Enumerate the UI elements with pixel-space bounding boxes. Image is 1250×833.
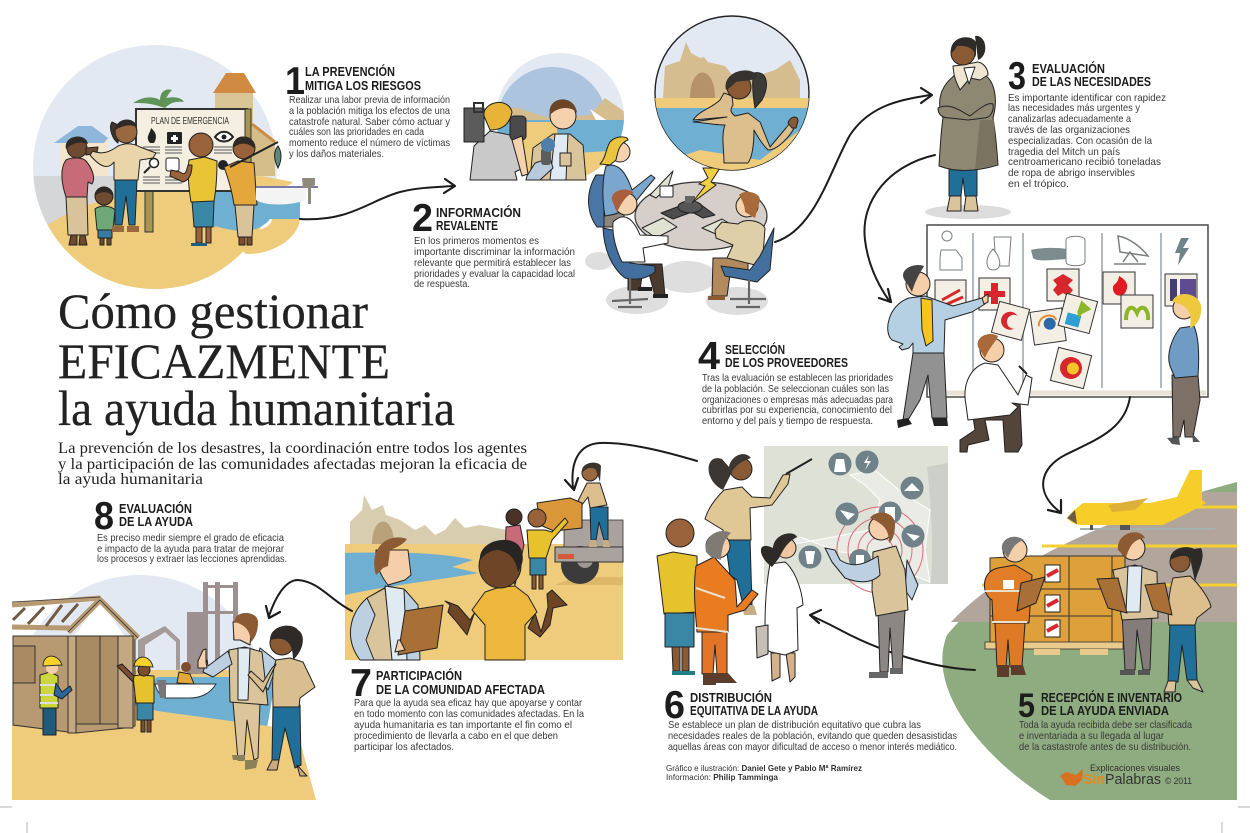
text block: step 7: procedimiento de llevarla a cabo en el que deben — [354, 731, 558, 742]
figure: woman in beige — [248, 626, 315, 776]
speech bubble with aid worker — [655, 16, 810, 203]
heading: step 1 — [285, 60, 421, 103]
text block: step 3 — [1008, 93, 1166, 190]
arrow: step 6 to 7 — [565, 443, 697, 490]
text block: step 1: cuáles son las prioridades en cada — [289, 127, 424, 138]
truck — [555, 520, 623, 584]
heading: step 2: 2 — [412, 197, 433, 240]
heading: step 3 — [1008, 55, 1151, 98]
icon: bull — [1060, 769, 1083, 786]
map icons — [805, 455, 920, 568]
text block: step 5 — [1019, 720, 1192, 753]
logo: SinPalabras — [1060, 763, 1192, 788]
scene background — [12, 575, 316, 825]
text block: step 7: Para que la ayuda sea eficaz hay que apoyarse y contar — [354, 698, 583, 709]
figure: worker in orange — [984, 537, 1045, 677]
text block: step 3: especializadas. Con ocasión de la — [1008, 136, 1152, 147]
heading: step 3: DE LAS NECESIDADES — [1032, 75, 1151, 89]
credits — [666, 763, 862, 782]
houses and church — [54, 73, 275, 176]
figure: boy in yellow shirt — [445, 540, 567, 660]
arrow: step 4 to 5 — [1043, 397, 1130, 513]
panel: step 6 distribution scene — [657, 446, 948, 685]
crop marks — [0, 807, 1250, 833]
text block: step 8 — [97, 533, 287, 565]
panel: step 1 emergency plan scene — [30, 45, 318, 300]
text block: step 5: de la castastrofe antes de su distribución. — [1019, 742, 1191, 753]
text block: step 8: e impacto de la ayuda para tratar de mejorar — [97, 544, 285, 555]
text block: step 3: canalizarlas adecuadamente a — [1008, 114, 1131, 125]
floor shadows — [585, 252, 768, 315]
heading: step 7: 7 — [350, 662, 372, 705]
board icons — [143, 128, 233, 183]
figure: aid worker — [198, 613, 278, 770]
logo: SinPalabras: © 2011 — [1165, 776, 1192, 787]
text block: step 6 — [668, 720, 957, 753]
text block: step 3: través de las organizaciones — [1008, 125, 1130, 136]
text block: step 1: momento reduce el número de víctimas — [289, 138, 450, 149]
whiteboard — [927, 225, 1208, 397]
figure: woman on truck — [576, 463, 610, 547]
figure: man in vest — [825, 513, 918, 678]
text block: step 7: en todo momento con las comunidades afectadas. En la — [354, 709, 584, 720]
heading: step 4: 4 — [698, 335, 720, 378]
heading: step 5 — [1018, 687, 1182, 725]
heading: step 6: 6 — [664, 684, 685, 727]
heading: step 3: 3 — [1008, 55, 1026, 98]
cargo boxes — [985, 556, 1125, 655]
text block: step 7 — [354, 698, 584, 753]
panel: step 5 airfield background — [942, 482, 1237, 800]
text block: step 2: prioridades y evaluar la capacidad local — [414, 269, 575, 280]
subtitle: la ayuda humanitaria — [58, 471, 203, 488]
heading: step 3: EVALUACIÓN — [1032, 61, 1105, 76]
heading: step 2: REVALENTE — [436, 219, 498, 233]
subtitle — [58, 440, 527, 488]
text block: step 4: cubrirlas por su experiencia, conocimiento del — [702, 405, 892, 416]
figure: child in green — [95, 187, 115, 245]
figure: boy in orange with fishing rod — [224, 136, 281, 245]
figure: reporter — [526, 99, 586, 180]
text block: step 1: Realizar una labor previa de información — [289, 95, 450, 106]
map — [764, 446, 948, 593]
figure: builder in yellow — [117, 657, 154, 732]
figure: instructor — [90, 119, 156, 232]
credits: Información: Philip Tamminga — [666, 772, 778, 782]
panel: step 2 meeting scene — [585, 16, 810, 315]
text block: step 7: ayuda humanitaria es tan importante el fin como el — [354, 720, 572, 731]
papers and cup on table — [642, 171, 737, 238]
figure: step 3 woman in coat — [925, 36, 1011, 219]
palm tree — [133, 89, 184, 108]
text block: step 8: los procesos y extraer las lecciones aprendidas. — [97, 554, 287, 565]
heading: step 5: DE LA AYUDA ENVIADA — [1041, 704, 1169, 718]
column icons — [940, 231, 1189, 270]
title: EFICAZMENTE — [58, 333, 390, 389]
cargo box — [537, 498, 582, 531]
figure: boy in yellow — [170, 133, 217, 246]
subtitle: y la participación de las comunidades afectadas mejoran la eficacia de — [58, 456, 527, 473]
figure: aid worker with clipboard — [350, 537, 443, 660]
text block: step 2 — [414, 236, 575, 290]
heading: step 2 — [412, 197, 521, 240]
speakerphone — [661, 196, 715, 219]
arrow: step 5 to 6 — [810, 610, 975, 670]
text block: step 4: Tras la evaluación se establecen las prioridades — [702, 373, 893, 384]
text block: step 4: organizaciones o empresas más adecuadas para — [702, 395, 893, 406]
heading: step 6: DISTRIBUCIÓN — [690, 690, 772, 705]
figure: kneeling man — [960, 334, 1032, 452]
heading: step 7: DE LA COMUNIDAD AFECTADA — [376, 683, 545, 697]
heading: step 4 — [698, 335, 848, 378]
text block: step 1: y los daños materiales. — [289, 149, 384, 160]
figure: woman with pointer — [705, 454, 812, 615]
text block: step 5: Toda la ayuda recibida debe ser clasificada — [1019, 720, 1192, 731]
text block: step 4: de la población. Se seleccionan cuáles son las — [702, 384, 889, 395]
title: Cómo gestionar — [58, 283, 368, 339]
figure: man with clipboard — [1097, 532, 1158, 675]
logo cards — [935, 269, 1197, 389]
text block: step 2: relevante que permitirá establecer las — [414, 258, 571, 269]
text block: step 1 — [289, 95, 451, 160]
arrow: step 7 to 8 — [266, 580, 352, 618]
heading: step 1: LA PREVENCIÓN — [305, 64, 395, 79]
panel: step 8 evaluation scene — [12, 575, 316, 825]
arrow: step 1 to 2 — [300, 179, 455, 219]
text block: step 3: Es importante identificar con rapidez — [1008, 93, 1166, 104]
title: la ayuda humanitaria — [58, 380, 455, 436]
arrow: step 3 to 4 — [864, 155, 935, 302]
figure: doctor in white — [756, 533, 803, 682]
heading: step 6: EQUITATIVA DE LA AYUDA — [690, 704, 818, 718]
text block: step 3: en el trópico. — [1008, 179, 1069, 190]
text block: step 2: En los primeros momentos es — [414, 236, 539, 247]
boat with fisherman — [155, 662, 216, 698]
figure: man in tie — [888, 265, 988, 428]
heading: step 8: DE LA AYUDA — [119, 515, 193, 529]
heading: step 7: PARTICIPACIÓN — [376, 668, 462, 683]
scene background — [30, 45, 300, 300]
hut under construction — [12, 597, 138, 733]
figure: camera operator — [464, 102, 528, 180]
board title: PLAN DE EMERGENCIA — [151, 116, 229, 127]
text block: step 4: entorno y del país y tiempo de respuesta. — [702, 416, 873, 427]
figure: woman with blonde hair — [1167, 294, 1201, 445]
text block: step 3: tragedia del Mitch un país — [1008, 147, 1120, 158]
text block: step 5: e inventariada a su llegada al lugar — [1019, 731, 1165, 742]
text block: step 2: de respuesta. — [414, 279, 470, 290]
plane — [1067, 470, 1206, 530]
figure: worker in orange — [694, 531, 758, 685]
heading: step 1: 1 — [285, 60, 305, 103]
panel: step 7 community scene — [345, 463, 623, 660]
heading: step 5: 5 — [1018, 687, 1035, 725]
scene backdrop — [497, 53, 624, 176]
heading: step 4: SELECCIÓN — [725, 342, 785, 357]
emergency board — [136, 109, 251, 232]
heading: step 7 — [350, 662, 545, 705]
text block: step 4 — [702, 373, 893, 427]
heading: step 8: EVALUACIÓN — [119, 501, 192, 516]
figure: boy in yellow — [657, 519, 697, 675]
panel: step 4 selection board — [888, 225, 1208, 452]
meeting table — [635, 182, 767, 250]
text block: step 7: participar los afectados. — [354, 742, 454, 753]
title — [58, 283, 455, 436]
text block: step 3: de ropa de abrigo inservibles — [1008, 168, 1135, 179]
text block: step 2: importante discriminar la información — [414, 247, 575, 258]
heading: step 8 — [94, 495, 193, 538]
heading: step 4: DE LOS PROVEEDORES — [725, 356, 848, 370]
logo: SinPalabras: Explicaciones visuales — [1090, 763, 1180, 774]
heading: step 6 — [664, 684, 818, 727]
text block: step 8: Es preciso medir siempre el grado de eficacia — [97, 533, 284, 544]
text block: step 3: centroamericano recibió toneladas — [1008, 157, 1161, 168]
text block: step 6: Se establece un plan de distribución equitativo que cubra las — [668, 720, 921, 731]
figure: man in beige shirt, blue chair — [708, 192, 774, 307]
heading: step 2: INFORMACIÓN — [436, 205, 521, 220]
logo: SinPalabras: Palabras — [1105, 771, 1161, 788]
text block: step 3: las necesidades más urgentes y — [1008, 103, 1141, 114]
panel: step 5 reception scene — [984, 470, 1211, 692]
figure: woman with clipboard — [1145, 547, 1211, 692]
heading: step 5: RECEPCIÓN E INVENTARIO — [1041, 690, 1182, 705]
figure: builder in vest — [40, 656, 72, 735]
arrow: step 2 to 3 — [775, 88, 932, 242]
logo: SinPalabras: Sin — [1083, 771, 1105, 788]
text block: step 6: necesidades reales de la población, evitando que queden desasistidas — [668, 731, 957, 742]
figure: man in white shirt, blue chair — [603, 189, 668, 307]
subtitle: La prevención de los desastres, la coordinación entre todos los agentes — [58, 440, 527, 457]
heading: step 8: 8 — [94, 495, 114, 538]
text block: step 1: a la población mitiga los efectos de una — [289, 106, 450, 117]
heading: step 1: MITIGA LOS RIESGOS — [305, 79, 421, 93]
figure: woman with blonde hair — [589, 137, 655, 227]
text block: step 6: aquellas áreas con mayor dificultad de acceso o menor interés mediático. — [668, 742, 957, 753]
figure: woman in pink — [62, 137, 98, 245]
distant frame building — [138, 626, 180, 670]
text block: step 1: catastrofe natural. Saber cómo actuar y — [289, 117, 451, 128]
figure: woman in pink background — [505, 509, 524, 585]
figure: boy carrying — [527, 509, 568, 589]
credits: Gráfico e ilustración: Daniel Gete y Pablo Mª Ramírez — [666, 763, 862, 773]
aid worker on phone — [693, 70, 798, 163]
scene background — [345, 495, 623, 660]
panel: step 2 camera scene — [464, 50, 630, 185]
boat and motor — [256, 178, 318, 204]
